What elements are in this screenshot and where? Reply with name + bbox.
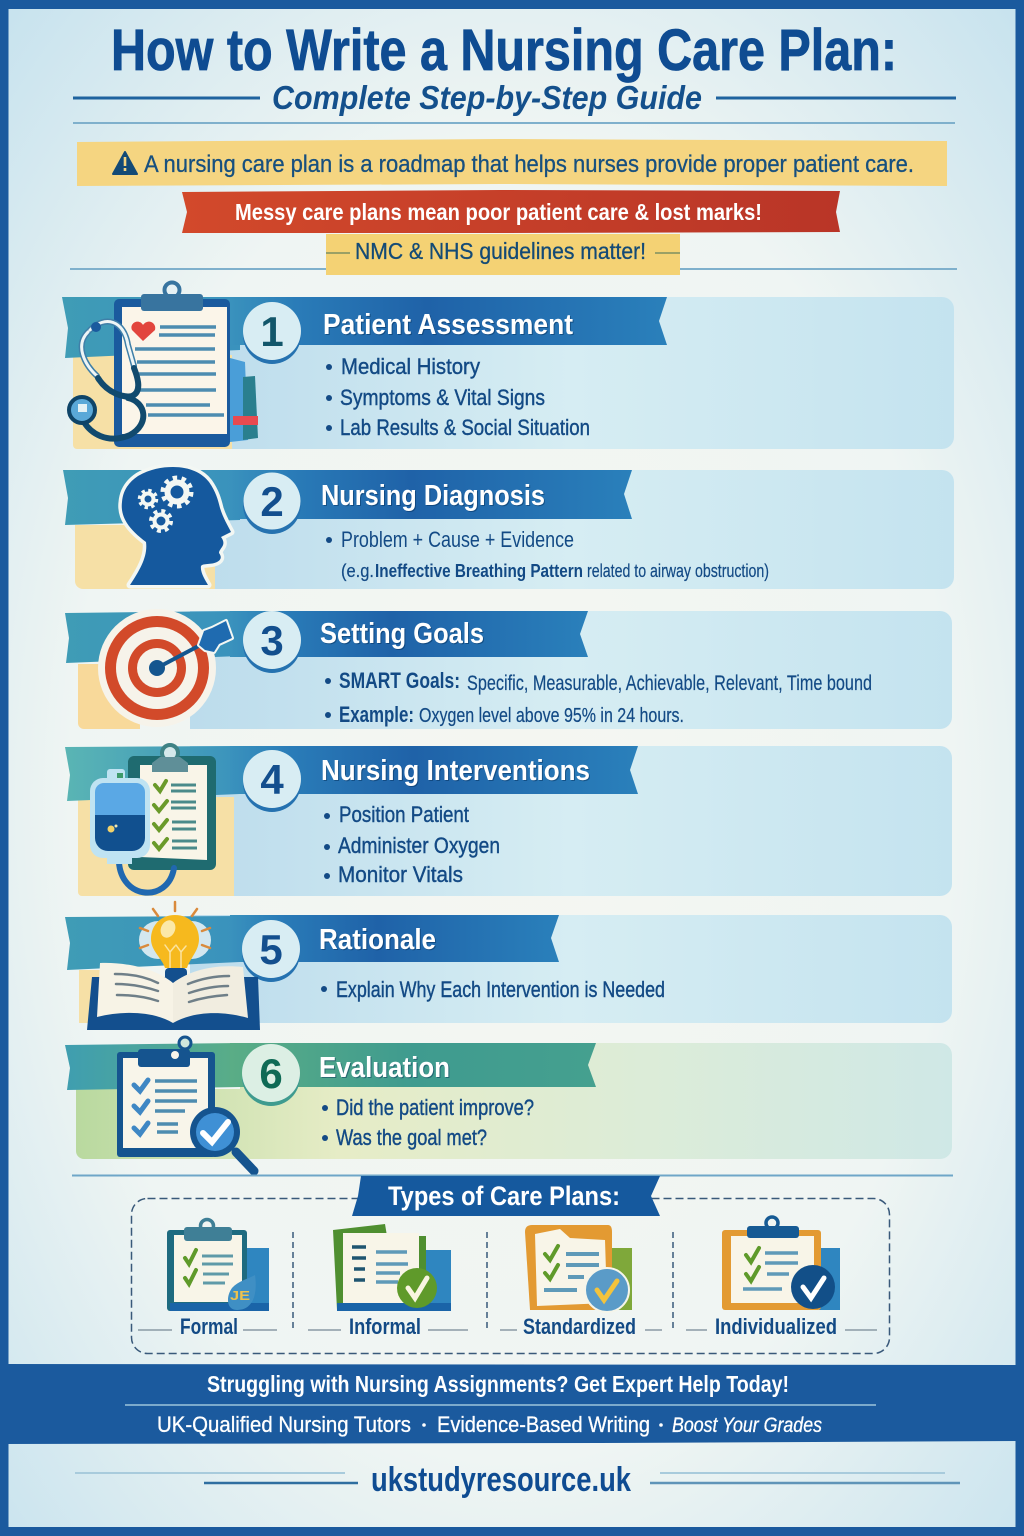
heading: Evaluation [319,1052,450,1084]
banner: roadmap intro: A nursing care plan is a roadmap that helps nurses provide proper patient care. [144,151,914,178]
bullet list: Monitor Vitals [338,862,463,887]
step number [243,611,301,673]
heading: Nursing Diagnosis [321,480,545,512]
icon: warning triangle [113,152,137,174]
bullet list: related to airway obstruction) [587,561,769,581]
bullet list: Did the patient improve? [336,1095,534,1120]
label: Informal [349,1314,421,1339]
icon: open book with lightbulb [87,902,260,1030]
type: informal [333,1224,451,1339]
footer call to action band: Evidence-Based Writing [437,1412,650,1437]
section: types of care plans [132,1176,890,1354]
icon: target with arrow [98,609,232,727]
ribbon [230,470,632,519]
icon: checklist and magnifier [117,1037,254,1171]
subtitle: Complete Step-by-Step Guide [272,79,702,116]
footer call to action band: Boost Your Grades [672,1414,822,1437]
bullet list: Example: [339,702,414,727]
step number [242,920,300,982]
bullet list [324,802,500,887]
panel: step 4 nursing interventions [65,745,952,896]
website url: ukstudyresource.uk [371,1461,631,1499]
icon: informal folder [333,1224,451,1311]
banner: warning red: Messy care plans mean poor patient care & lost marks! [235,199,762,225]
bullet list [325,668,872,727]
bullet list [322,1095,534,1150]
ribbon [230,746,638,794]
ribbon [230,611,588,657]
step number: 1 [260,308,284,355]
bullet list: Oxygen level above 95% in 24 hours. [419,705,684,727]
banner: guidelines [70,234,957,275]
bullet list: Specific, Measurable, Achievable, Relevant, Time bound [467,672,872,695]
icon: standardized folder [525,1225,632,1312]
type: formal [167,1220,269,1339]
step number: 2 [260,478,284,525]
step number: 5 [259,926,283,973]
bullet list: SMART Goals: [339,668,460,693]
bullet list: Medical History [341,354,480,379]
icon: formal clipboard: JE [230,1288,250,1303]
bullet list: Was the goal met? [336,1125,487,1150]
step number [243,750,301,812]
bullet list: Explain Why Each Intervention is Needed [336,977,665,1002]
step number: 3 [260,617,284,664]
heading: Setting Goals [320,618,484,650]
bullet list [326,527,769,581]
icon: individualized clipboard [722,1217,840,1310]
panel: step 2 nursing diagnosis [63,467,954,589]
footer call to action band: UK-Qualified Nursing Tutors [157,1412,411,1437]
banner: roadmap intro [77,139,947,186]
heading: Nursing Interventions [321,755,590,787]
step number [243,302,301,364]
footer call to action band [0,1364,1024,1444]
panel: step 6 evaluation [65,1037,952,1171]
banner: guidelines: NMC & NHS guidelines matter! [355,238,646,264]
label: Standardized [523,1314,636,1339]
bullet list: (e.g. [341,561,374,581]
title: How to Write a Nursing Care Plan: [111,18,897,83]
panel: step 1 patient assessment [62,282,954,449]
ribbon [230,297,667,345]
bullet list: Symptoms & Vital Signs [340,385,545,410]
ribbon heading: Types of Care Plans: [388,1181,620,1211]
panel: step 5 rationale [65,902,952,1030]
heading: Rationale [319,924,436,956]
bullet list: Administer Oxygen [338,833,500,858]
banner: warning red [182,190,840,233]
icon: head with gears [122,467,231,585]
ribbon [230,915,559,962]
bullet list: Lab Results & Social Situation [340,415,590,440]
icon: clipboard with stethoscope [69,282,258,447]
type: standardized [523,1225,636,1339]
label: Formal [180,1314,238,1339]
ribbon [230,1043,596,1087]
heading: Patient Assessment [323,309,573,341]
footer call to action band: Struggling with Nursing Assignments? Get Expert Help Today! [207,1371,789,1397]
step number: 6 [259,1050,283,1097]
icon: iv bag and checklist [90,745,216,893]
bullet list: Problem + Cause + Evidence [341,527,574,552]
step number: 4 [260,756,284,803]
label: Individualized [715,1314,837,1339]
bullet list: Ineffective Breathing Pattern [375,561,583,581]
panel: step 3 setting goals [65,609,952,729]
type: individualized [715,1217,840,1339]
step number [243,472,301,534]
bullet list: Position Patient [339,802,469,827]
step number [242,1044,300,1106]
ribbon heading [352,1176,660,1216]
bullet list [326,354,590,440]
